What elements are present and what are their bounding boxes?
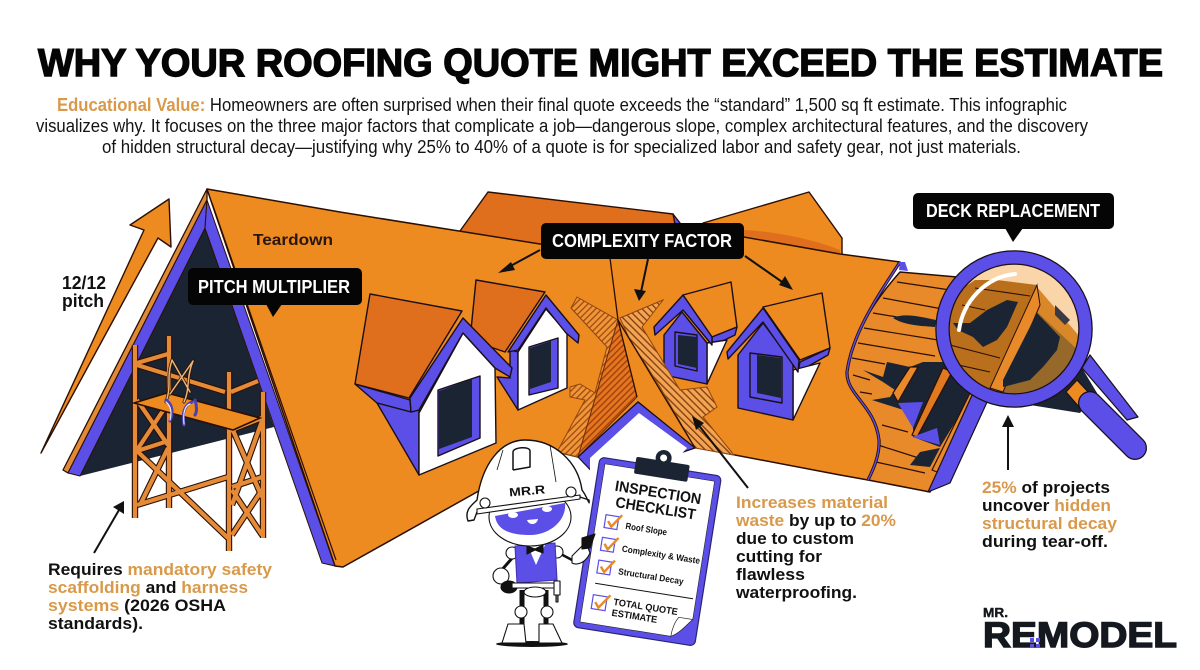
deck edge trim colour: [847, 262, 900, 480]
deck fascia: [928, 393, 988, 492]
arrows from complexity factor: [498, 250, 793, 301]
logo: mr. remodel: MR.: [983, 605, 1008, 620]
magnifier lens contents: [950, 264, 1078, 394]
harness: [166, 360, 196, 425]
note: material waste: due to custom: [736, 529, 854, 548]
note: scaffolding: [48, 560, 273, 633]
note: hidden decay: uncover hidden: [982, 496, 1111, 515]
callout: pitch multiplier: [188, 268, 362, 317]
mascot hard hat: MR.R: [509, 482, 546, 500]
exposed deck boards: [847, 272, 975, 492]
note: hidden decay: during tear-off.: [982, 532, 1108, 551]
scaffolding: [135, 336, 263, 551]
valley ridge lines: [610, 258, 695, 448]
intro text: [36, 95, 1088, 157]
check item: complexity and waste: [600, 535, 702, 566]
check item: complexity and waste: Complexity & Waste: [621, 544, 701, 566]
mascot eyes and mouth: [508, 506, 552, 524]
checklist heading: [611, 478, 702, 524]
checklist heading: CHECKLIST: [614, 494, 697, 524]
clipboard clip: [634, 446, 692, 482]
check item: structural decay: Structural Decay: [618, 566, 684, 587]
note: hidden decay: 25% of projects: [982, 478, 1110, 497]
mascot hand over clipboard: [572, 534, 595, 564]
note: scaffolding: Requires mandatory safety: [48, 560, 273, 579]
intro text: of hidden structural decay—justifying why 25% to 40% of a quote is for specialized labor and safety gear, not just materials.: [102, 137, 1021, 157]
note: scaffolding: systems (2026 OSHA: [48, 596, 226, 615]
mascot shadow: [496, 641, 568, 647]
front gable: [578, 402, 695, 500]
valley center ridge: [578, 320, 637, 457]
check item: roof slope: [604, 513, 669, 537]
logo: mr. remodel: REMODEL: [983, 616, 1177, 655]
mascot legs: [502, 590, 562, 643]
checklist heading: INSPECTION: [614, 478, 702, 508]
magnifier ring colour: [942, 258, 1086, 400]
check item: structural decay: [597, 558, 685, 587]
page curl: [671, 617, 693, 639]
note: material waste: cutting for: [736, 547, 822, 566]
note: material waste: waste by up to 20%: [735, 511, 896, 530]
arrow: scaffolding note: [94, 501, 124, 553]
main roof surface: [207, 189, 900, 567]
note: scaffolding: scaffolding and harness: [48, 578, 248, 597]
magnifier ring: [942, 258, 1086, 400]
check item: total quote estimate: TOTAL QUOTE: [613, 597, 678, 618]
intro text: Educational Value: Homeowners are often surprised when their final quote exceeds the “standard” 1,500 sq ft estimate. This infographic: [57, 95, 1067, 115]
deck corner trim: [899, 262, 908, 271]
mascot head: [489, 488, 571, 546]
label: 12/12 pitch: [62, 273, 106, 311]
lens highlight: [959, 274, 1015, 330]
deck decay holes: [863, 315, 973, 467]
check item: roof slope: Roof Slope: [625, 521, 668, 537]
label: 12/12 pitch: 12/12: [62, 273, 106, 293]
callout: deck replacement: DECK REPLACEMENT: [926, 201, 1100, 221]
mascot vest: [515, 543, 557, 583]
scaffolding outline: [135, 336, 263, 551]
dormer 4: [727, 293, 830, 420]
title: WHY YOUR ROOFING QUOTE MIGHT EXCEED THE ESTIMATE: [38, 42, 1163, 85]
note: hidden decay: [982, 478, 1118, 551]
callout: pitch multiplier: PITCH MULTIPLIER: [198, 277, 350, 297]
dormer 3: [654, 282, 737, 384]
clipboard board: [573, 457, 721, 646]
note: scaffolding: standards).: [48, 614, 143, 633]
dormer 2: [470, 280, 579, 410]
note: material waste: Increases material: [736, 493, 888, 512]
callout: complexity factor: COMPLEXITY FACTOR: [552, 231, 732, 251]
valley flashing: left strip: [557, 297, 618, 457]
mascot face: [495, 503, 565, 535]
clipboard: inspection checklist: [573, 440, 724, 646]
mascot arms: [493, 546, 572, 593]
clipboard paper: [580, 464, 715, 639]
dormer 1: [355, 294, 512, 475]
arrow: waste note: [692, 416, 748, 488]
note: hidden decay: structural decay: [982, 514, 1118, 533]
label: 12/12 pitch: pitch: [62, 291, 104, 311]
label: teardown: Teardown: [253, 232, 333, 249]
check item: total quote estimate: [590, 593, 679, 629]
a-frame gable with dark interior: [63, 189, 335, 566]
deck joists: [893, 367, 975, 472]
callout: deck replacement: [913, 193, 1114, 242]
callout: complexity factor: [541, 223, 744, 259]
note: material waste: waterproofing.: [735, 583, 857, 602]
back roof sections: [460, 192, 842, 262]
note: material waste: flawless: [736, 565, 805, 584]
magnifier handle: [1030, 355, 1138, 448]
valley flashing: right strip: [620, 300, 734, 455]
note: material waste: [735, 493, 896, 602]
intro text: visualizes why. It focuses on the three major factors that complicate a job—dangerous slope, complex architectural features, and the discovery: [36, 116, 1088, 136]
deck edge trim: [847, 262, 900, 480]
scaffold platform: [134, 393, 260, 430]
arrow: decay note: [1002, 415, 1014, 470]
logo window icon: [1030, 638, 1040, 648]
check item: total quote estimate: ESTIMATE: [611, 608, 658, 626]
roof ridge line: [212, 203, 336, 560]
pitch arrow: [41, 199, 171, 453]
mascot tool belt: [512, 581, 560, 602]
mascot: mr. r robot: [467, 440, 589, 647]
mascot bow tie: [527, 545, 543, 554]
mascot hard hat: [467, 440, 589, 521]
